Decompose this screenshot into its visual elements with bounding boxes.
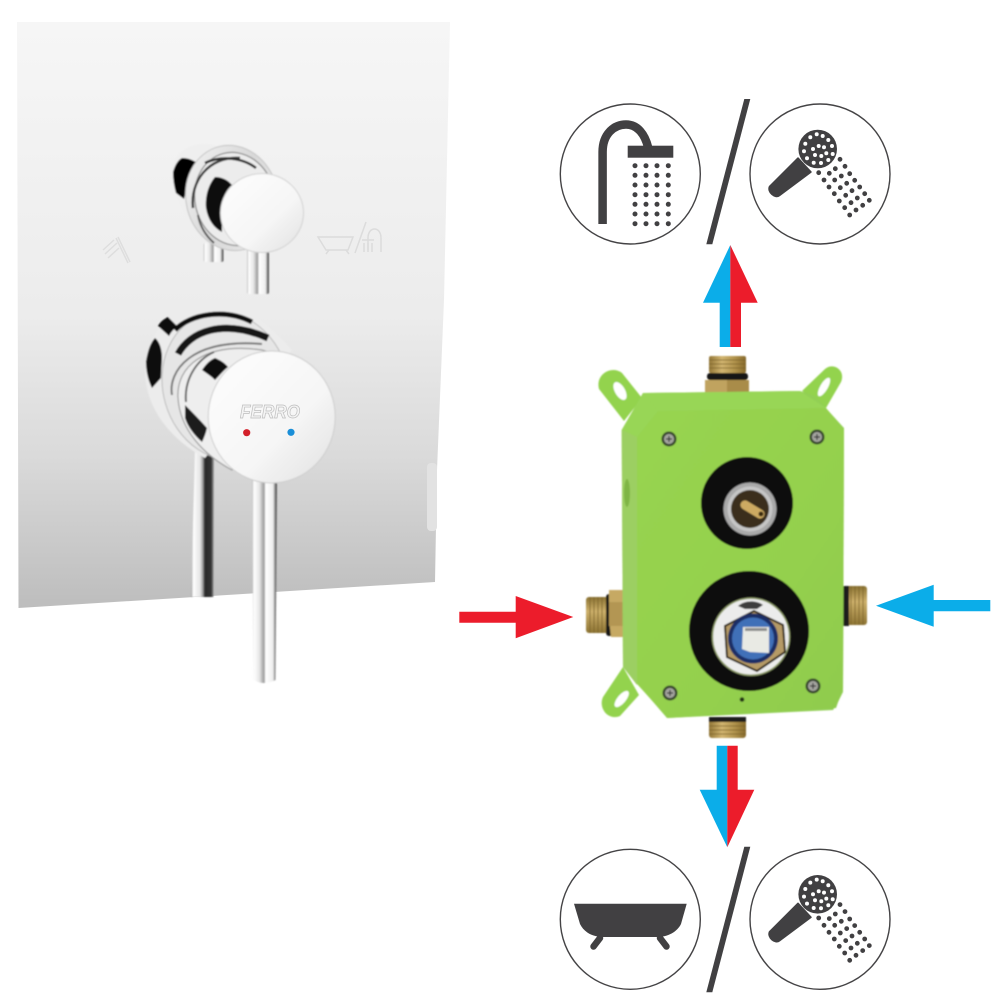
icon: engraved hand shower on plate [103, 237, 130, 263]
slash divider [706, 847, 750, 992]
mounting ear: bottom left [602, 667, 639, 717]
front face [637, 408, 844, 718]
top-left chamfer [622, 393, 658, 437]
arrow: hot inlet [459, 596, 573, 638]
screw: bottom left [662, 686, 678, 700]
inner cylinder [178, 348, 300, 470]
flange ring [145, 297, 307, 475]
icon: engraved bath and shower on plate [318, 222, 381, 254]
arrow: outlet down, mixed water [700, 746, 754, 847]
fitting: right inlet [843, 586, 867, 626]
box body [622, 391, 844, 718]
screw: top right [810, 430, 824, 444]
panel: faucet photo illustration [17, 22, 450, 683]
lower valve cartridge [712, 598, 790, 675]
icon: hand shower [750, 849, 890, 989]
icon: hand shower [750, 104, 890, 244]
arrow: outlet up, mixed water [703, 245, 758, 347]
panel: green valve box [586, 356, 867, 738]
rear barrel [171, 144, 250, 245]
fitting: left inlet [586, 590, 631, 637]
rear lever [204, 243, 224, 262]
left side strip [622, 430, 637, 685]
inner cylinder shadow [206, 177, 232, 232]
front disc [208, 351, 335, 483]
main lever mixer [145, 297, 335, 683]
main lever [252, 480, 277, 683]
slash divider [706, 99, 750, 244]
flange [175, 135, 289, 261]
front disc [220, 174, 304, 252]
cold marker [287, 429, 295, 436]
plate notch highlight [427, 463, 437, 531]
upper valve spindle [724, 482, 776, 536]
top rim [643, 391, 826, 411]
side port recess [624, 479, 630, 507]
lower rubber seal [689, 571, 809, 691]
screw: top left [662, 432, 676, 446]
upper rubber seal [701, 457, 793, 549]
logo: FERRO: FERRO [240, 402, 300, 422]
icon: overhead shower [560, 104, 700, 244]
panel: top outlet icons [560, 99, 890, 244]
wall plate [17, 22, 450, 608]
mounting ear: top right [802, 366, 842, 408]
rear barrel [145, 304, 292, 458]
screw: bottom right [806, 678, 820, 694]
fitting: top outlet [705, 356, 749, 401]
hot marker [243, 429, 250, 436]
front lever [247, 248, 269, 294]
small diverter knob [171, 135, 304, 294]
panel: bottom outlet icons [560, 847, 890, 992]
rear pipe [191, 450, 214, 597]
drain hole [740, 697, 744, 702]
icon: bathtub [560, 849, 700, 989]
fitting: bottom outlet [709, 717, 746, 738]
mounting ear: top left [598, 370, 642, 421]
arrow: cold inlet [876, 585, 990, 627]
